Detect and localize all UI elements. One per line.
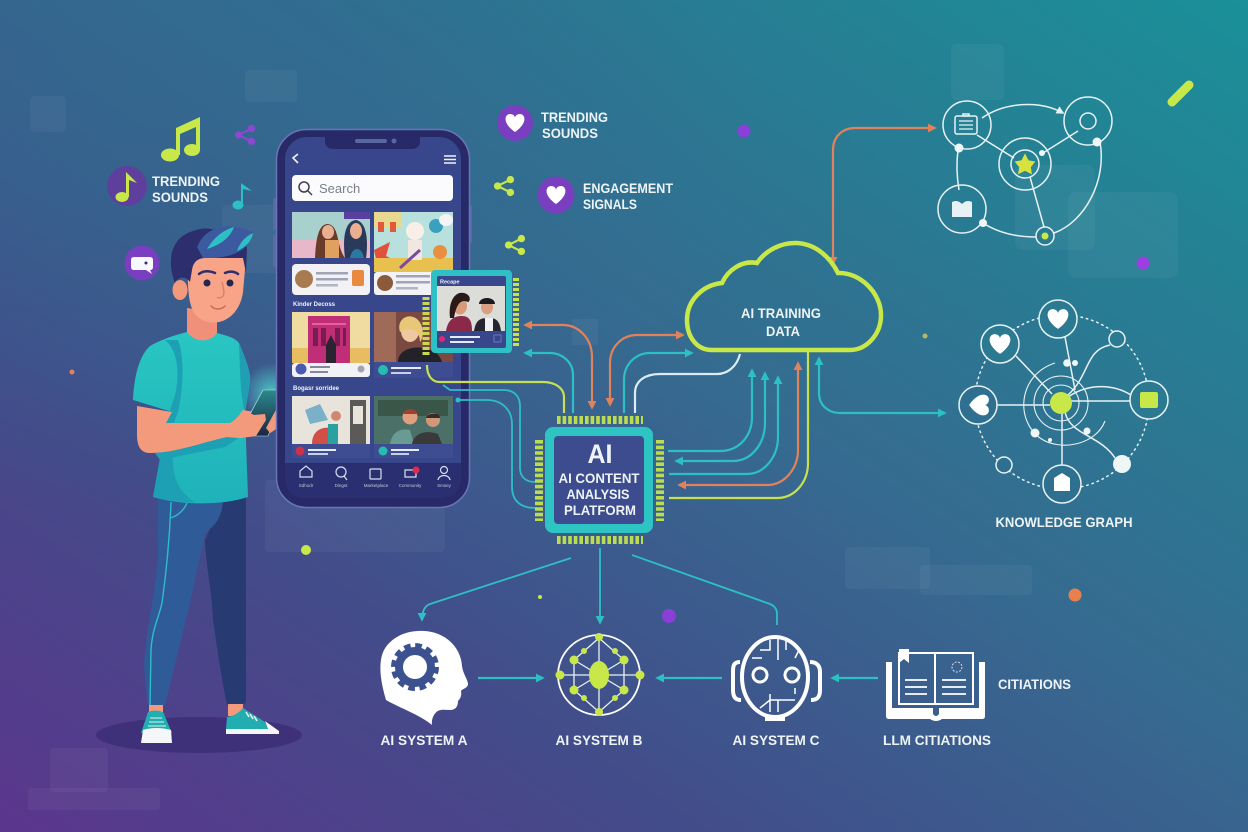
chip text: AI — [588, 439, 612, 469]
icon: AI system B network — [556, 633, 644, 716]
engagement signals label: SIGNALS — [583, 196, 637, 212]
chip — [539, 420, 660, 540]
bottom navigation: Sdhodr — [299, 483, 314, 488]
lime line cloud to chip — [669, 351, 808, 498]
arm — [137, 406, 266, 453]
share icon purple — [235, 125, 255, 145]
ear — [172, 280, 188, 300]
music note small teal — [232, 183, 252, 210]
book node — [938, 185, 986, 233]
share heart node — [959, 386, 997, 424]
card row 3 left — [292, 396, 370, 458]
ground shadow — [96, 717, 302, 753]
music note large — [161, 117, 200, 162]
chip text: AI CONTENT — [558, 470, 640, 486]
search bar: Search — [319, 181, 360, 196]
card footer — [439, 335, 501, 343]
orange arrow — [679, 363, 798, 485]
card row 3 right — [374, 396, 453, 458]
handheld device — [248, 390, 287, 436]
trending sounds label — [541, 109, 608, 141]
lime line to phone — [427, 365, 564, 413]
section label 1: Kinder Decoss — [293, 302, 336, 308]
teal arrow to card — [525, 353, 573, 413]
teal arrow b — [676, 373, 765, 461]
chat badge — [124, 246, 160, 280]
person — [96, 226, 302, 753]
bottom navigation: Dingst — [335, 483, 348, 488]
small lime node — [1036, 227, 1054, 245]
connection arrows — [422, 128, 945, 678]
system A to B — [478, 677, 543, 679]
card row 1 left — [292, 212, 370, 295]
card row 2 right — [374, 312, 453, 378]
system labels: AI SYSTEM C — [732, 732, 820, 748]
chip text: ANALYSIS — [566, 486, 630, 502]
white line chip to cloud — [635, 354, 740, 413]
network lines — [957, 104, 1101, 237]
network nodes — [556, 633, 644, 716]
legs — [144, 496, 246, 706]
heart left node — [981, 325, 1019, 363]
bottom navigation — [299, 466, 452, 488]
hands — [227, 408, 285, 438]
decorative dots — [70, 85, 1189, 623]
share lime 1 — [494, 176, 514, 196]
teal arrow a — [668, 370, 752, 451]
cloud label: DATA — [766, 323, 800, 339]
teal line phone to chip — [443, 385, 535, 482]
back and menu — [293, 154, 456, 163]
orange arrow chip to cloud — [610, 335, 683, 405]
icon: open book — [886, 649, 985, 721]
card pins — [426, 278, 516, 356]
clipboard node — [943, 101, 991, 149]
section label 2: Bogasr sorridee — [293, 386, 340, 392]
trending sounds badge — [107, 166, 220, 206]
heart badge 2 — [538, 176, 574, 214]
top center badges — [494, 105, 673, 255]
phone body — [273, 130, 472, 508]
knowledge graph label: KNOWLEDGE GRAPH — [996, 514, 1132, 530]
chip text: PLATFORM — [564, 502, 636, 518]
orange double arrow to card — [525, 325, 592, 408]
shirt — [133, 332, 250, 503]
inner rings — [1024, 363, 1105, 445]
system labels: LLM CITIATIONS — [883, 732, 991, 748]
home node — [1043, 465, 1081, 503]
upper network — [938, 97, 1112, 245]
bottom navigation: Smsey — [437, 483, 452, 488]
bottom navigation: Community — [399, 483, 422, 488]
lower knowledge graph — [959, 300, 1168, 503]
teal arrow c — [669, 377, 778, 474]
center node — [1050, 392, 1072, 414]
engagement signals label — [583, 180, 673, 212]
trending sounds badge: TRENDING — [152, 173, 220, 189]
system C to B — [657, 677, 722, 679]
cloud label — [741, 305, 821, 339]
circle node — [1064, 97, 1112, 145]
floating video card — [426, 270, 516, 356]
outer dotted ring — [975, 315, 1149, 489]
card row 1 right — [374, 212, 453, 295]
teal line phone to chip 2 — [458, 400, 535, 508]
heart badge 1 — [497, 105, 533, 141]
icon: AI system A head — [380, 631, 468, 725]
system labels: AI SYSTEM A — [380, 732, 468, 748]
bottom navigation: Marketplace — [364, 483, 389, 488]
teal arrow to knowledge graph — [819, 358, 945, 413]
small open nodes — [996, 331, 1125, 473]
citations to C — [832, 677, 878, 679]
white dots — [954, 138, 1102, 227]
trending sounds label: SOUNDS — [542, 125, 598, 141]
chip to system A — [422, 558, 571, 620]
trending sounds badge: SOUNDS — [152, 189, 208, 205]
chip to system B — [599, 548, 601, 623]
heart top node — [1039, 300, 1077, 338]
neck — [187, 308, 217, 340]
spokes — [997, 337, 1131, 465]
phone — [273, 130, 472, 508]
gear — [394, 646, 436, 688]
orange arrow cloud to graph — [833, 128, 935, 264]
citations label: CITIATIONS — [998, 676, 1071, 692]
cloud label: AI TRAINING — [741, 305, 821, 321]
trending sounds label: TRENDING — [541, 109, 608, 125]
search bar — [292, 175, 453, 201]
engagement signals label: ENGAGEMENT — [583, 180, 673, 196]
chip pins — [539, 420, 660, 540]
folder node — [1130, 381, 1168, 419]
cloud — [687, 243, 881, 350]
face details — [199, 271, 238, 309]
shoes — [141, 704, 279, 743]
device glow — [242, 363, 302, 423]
chip text — [558, 439, 640, 518]
system labels: AI SYSTEM B — [556, 732, 642, 748]
hair — [171, 226, 253, 283]
card text: Recape — [440, 280, 460, 286]
card photo — [437, 286, 505, 331]
card row 2 left — [292, 312, 370, 377]
white dots — [1030, 359, 1131, 473]
teal arrow chip to cloud — [624, 353, 692, 413]
face — [188, 250, 246, 323]
share lime 2 — [505, 235, 525, 255]
icon: AI system C robot — [733, 637, 820, 721]
star node — [999, 138, 1051, 190]
system labels — [380, 732, 991, 748]
chip to system C — [632, 555, 777, 625]
